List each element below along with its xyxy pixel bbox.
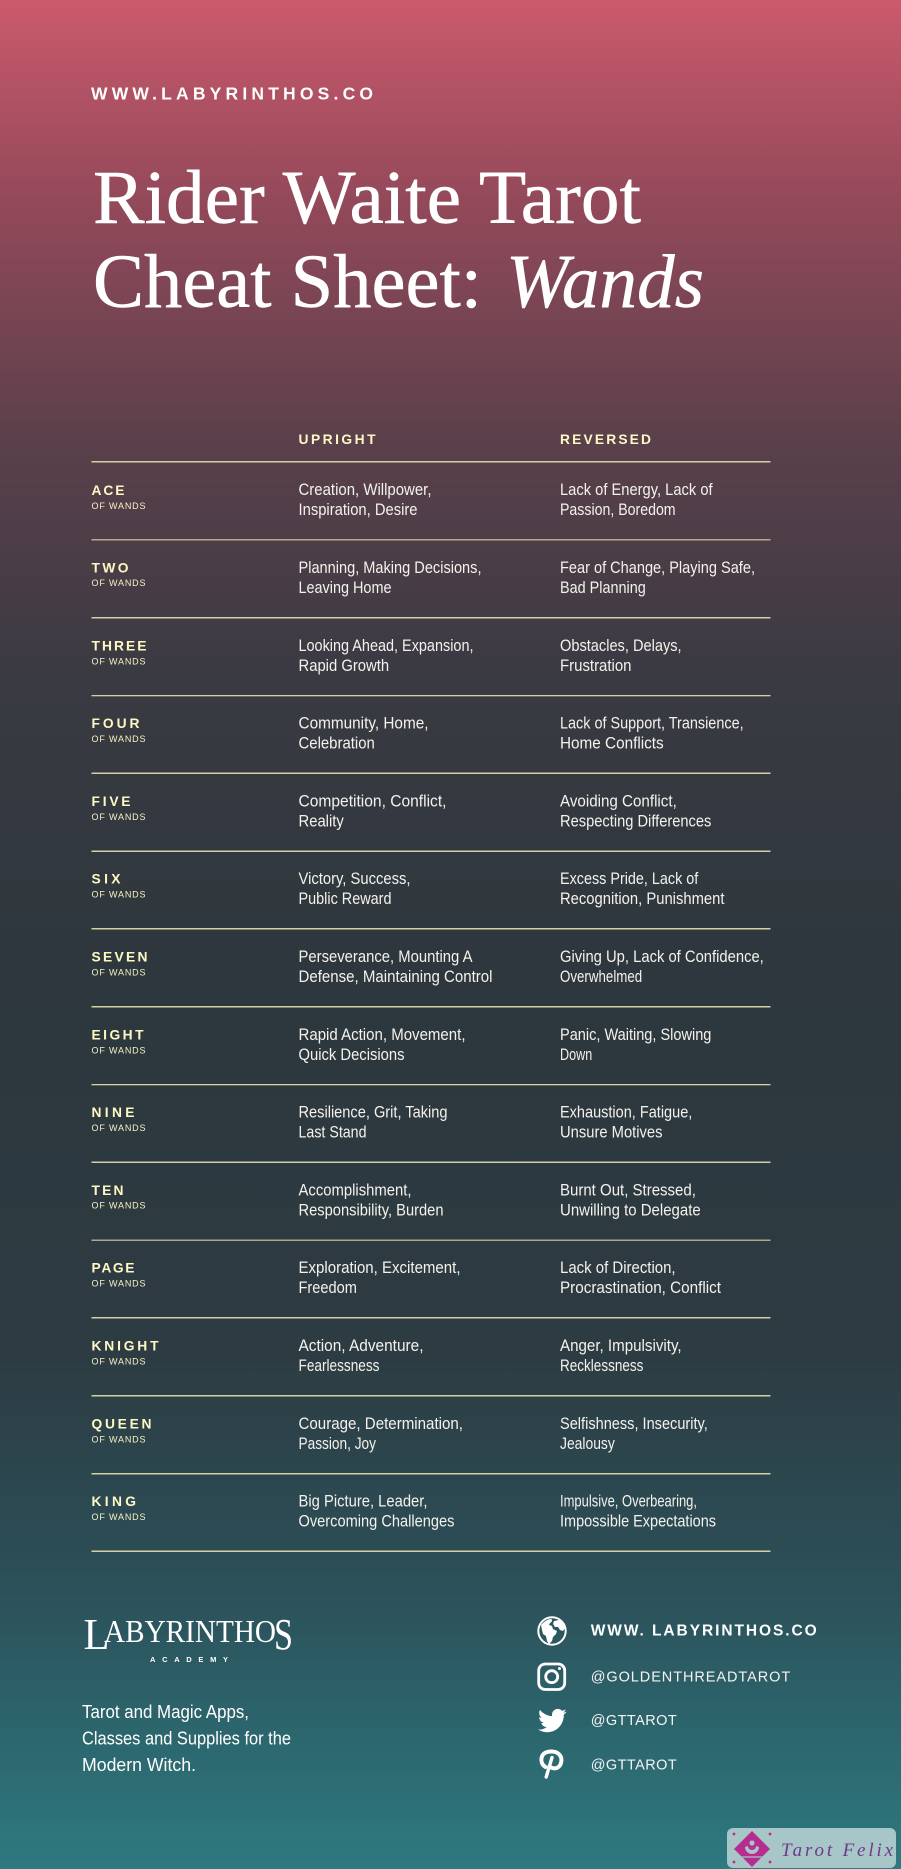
row: five of wands [92, 792, 711, 830]
row: five of wands: Respecting Differences [560, 812, 711, 830]
row: king of wands: Impulsive, Overbearing, [560, 1493, 697, 1511]
row: seven of wands: Perseverance, Mounting A [298, 948, 472, 966]
row: four of wands: Home Conflicts [560, 735, 664, 753]
row: four of wands: Community, Home, [298, 715, 428, 733]
row: four of wands [92, 715, 744, 753]
row: eight of wands: EIGHT [92, 1027, 144, 1042]
row: ten of wands: Burnt Out, Stressed, [560, 1181, 696, 1199]
footer tagline: Modern Witch. [82, 1755, 196, 1775]
row: page of wands: Freedom [298, 1279, 357, 1297]
row: seven of wands: Overwhelmed [560, 968, 642, 986]
row: nine of wands: Last Stand [298, 1124, 366, 1142]
row: three of wands: Obstacles, Delays, [560, 637, 682, 655]
icon: instagram [539, 1664, 565, 1690]
row: queen of wands: Jealousy [560, 1435, 615, 1453]
row: eight of wands: Quick Decisions [298, 1046, 404, 1064]
twitter handle: @GTTAROT [591, 1713, 677, 1729]
row: knight of wands: Action, Adventure, [298, 1337, 424, 1355]
row: six of wands: SIX [92, 872, 121, 887]
row: seven of wands: Defense, Maintaining Control [298, 968, 492, 986]
icon: twitter [538, 1709, 567, 1732]
row: five of wands: OF WANDS [92, 812, 146, 822]
row: three of wands: THREE [92, 638, 146, 653]
row: seven of wands: SEVEN [92, 950, 148, 964]
row: two of wands [92, 559, 755, 597]
row: two of wands: Bad Planning [560, 579, 646, 597]
row: ace of wands: OF WANDS [92, 501, 146, 511]
tarot felix wordmark: Tarot Felix [781, 1840, 894, 1861]
row: five of wands: Avoiding Conflict, [560, 792, 677, 810]
row: eight of wands: Down [560, 1046, 592, 1064]
row: king of wands: Big Picture, Leader, [298, 1493, 428, 1511]
row: page of wands: Lack of Direction, [560, 1259, 676, 1277]
row: three of wands: Rapid Growth [298, 657, 389, 675]
footer logo: labyrinthos academy: S [274, 1610, 293, 1659]
row: nine of wands: NINE [92, 1105, 134, 1120]
row: ace of wands: ACE [92, 483, 124, 498]
footer tagline [82, 1702, 291, 1775]
row: five of wands: Competition, Conflict, [298, 792, 446, 810]
footer logo: labyrinthos academy: ABYRINTHO [104, 1613, 276, 1649]
row: king of wands: KING [92, 1494, 136, 1509]
row: nine of wands: Unsure Motives [560, 1124, 662, 1142]
row: queen of wands: QUEEN [92, 1416, 152, 1431]
footer logo: labyrinthos academy: L [84, 1610, 110, 1659]
row: three of wands: OF WANDS [92, 656, 146, 666]
instagram handle: @GOLDENTHREADTAROT [591, 1670, 790, 1686]
footer tagline: Tarot and Magic Apps, [82, 1702, 249, 1722]
row: queen of wands: Courage, Determination, [298, 1415, 463, 1433]
row: ace of wands: Passion, Boredom [560, 501, 676, 519]
website link: WWW. LABYRINTHOS.CO [591, 1623, 817, 1640]
footer logo: labyrinthos academy: ACADEMY [150, 1655, 228, 1664]
row: eight of wands: Panic, Waiting, Slowing [560, 1026, 711, 1044]
header url: WWW.LABYRINTHOS.CO [91, 84, 373, 104]
row: king of wands [92, 1493, 716, 1531]
row: knight of wands: OF WANDS [92, 1356, 146, 1366]
row: ten of wands: Unwilling to Delegate [560, 1201, 701, 1219]
title: Rider Waite Tarot [93, 156, 641, 240]
row: five of wands: FIVE [92, 794, 130, 809]
footer tagline: Classes and Supplies for the [82, 1728, 291, 1748]
title: Cheat Sheet: [93, 240, 482, 324]
row: ten of wands: Accomplishment, [298, 1181, 412, 1199]
row: ace of wands [92, 481, 713, 519]
row: ten of wands: Responsibility, Burden [298, 1201, 444, 1219]
row: two of wands: TWO [92, 560, 129, 576]
row: ace of wands: Inspiration, Desire [298, 501, 418, 519]
row: two of wands: Planning, Making Decisions, [298, 559, 482, 577]
row: nine of wands: OF WANDS [92, 1123, 146, 1133]
row: king of wands: Overcoming Challenges [298, 1513, 454, 1531]
row: six of wands: OF WANDS [92, 890, 146, 900]
row: queen of wands: OF WANDS [92, 1434, 146, 1444]
title: Wands [506, 240, 704, 324]
row: page of wands: PAGE [92, 1261, 134, 1276]
row: two of wands: OF WANDS [92, 578, 146, 588]
row: page of wands [92, 1259, 721, 1297]
row: six of wands [92, 870, 725, 908]
column header: reversed: REVERSED [560, 432, 651, 447]
row: nine of wands: Resilience, Grit, Taking [298, 1104, 448, 1122]
row: page of wands: OF WANDS [92, 1279, 146, 1289]
row: five of wands: Reality [298, 812, 344, 830]
row: eight of wands [92, 1026, 711, 1064]
row: three of wands [92, 637, 682, 675]
row: queen of wands: Passion, Joy [298, 1435, 377, 1453]
row: six of wands: Public Reward [298, 890, 392, 908]
row: two of wands: Fear of Change, Playing Safe, [560, 559, 755, 577]
row: knight of wands: KNIGHT [92, 1338, 159, 1354]
row: ten of wands: OF WANDS [92, 1200, 146, 1210]
row: ten of wands [92, 1181, 701, 1219]
row: ace of wands: Lack of Energy, Lack of [560, 481, 713, 499]
row: knight of wands: Recklessness [560, 1357, 643, 1375]
row: six of wands: Recognition, Punishment [560, 890, 725, 908]
row: knight of wands [92, 1337, 682, 1375]
row: six of wands: Excess Pride, Lack of [560, 870, 699, 888]
icon: globe [538, 1617, 566, 1645]
row: eight of wands: OF WANDS [92, 1045, 146, 1055]
row: four of wands: OF WANDS [92, 734, 146, 744]
row: queen of wands: Selfishness, Insecurity, [560, 1415, 708, 1433]
row: six of wands: Victory, Success, [298, 870, 410, 888]
row: nine of wands [92, 1104, 692, 1142]
row: ace of wands: Creation, Willpower, [298, 481, 432, 499]
icon: tarot felix lotus diamond [733, 1831, 771, 1867]
row: two of wands: Leaving Home [298, 579, 392, 597]
row: page of wands: Procrastination, Conflict [560, 1279, 721, 1297]
row: queen of wands [92, 1415, 708, 1453]
pinterest handle: @GTTAROT [591, 1757, 677, 1773]
row: three of wands: Looking Ahead, Expansion, [298, 637, 474, 655]
row: seven of wands: OF WANDS [92, 968, 146, 978]
footer logo: labyrinthos academy [84, 1610, 293, 1664]
row: nine of wands: Exhaustion, Fatigue, [560, 1104, 692, 1122]
row: page of wands: Exploration, Excitement, [298, 1259, 460, 1277]
row: eight of wands: Rapid Action, Movement, [298, 1026, 466, 1044]
badge: tarot felix [727, 1828, 896, 1868]
row: ten of wands: TEN [92, 1183, 124, 1198]
row: knight of wands: Fearlessness [298, 1357, 380, 1375]
title [93, 156, 704, 324]
row: seven of wands [92, 948, 764, 986]
row: seven of wands: Giving Up, Lack of Confidence, [560, 948, 764, 966]
row: four of wands: Celebration [298, 735, 375, 753]
row: four of wands: Lack of Support, Transience, [560, 715, 744, 733]
icon: pinterest [541, 1752, 561, 1777]
row: three of wands: Frustration [560, 657, 632, 675]
row: four of wands: FOUR [92, 716, 140, 731]
row: knight of wands: Anger, Impulsivity, [560, 1337, 682, 1355]
row: king of wands: OF WANDS [92, 1512, 146, 1522]
row: king of wands: Impossible Expectations [560, 1513, 716, 1531]
column header: upright: UPRIGHT [298, 432, 376, 447]
